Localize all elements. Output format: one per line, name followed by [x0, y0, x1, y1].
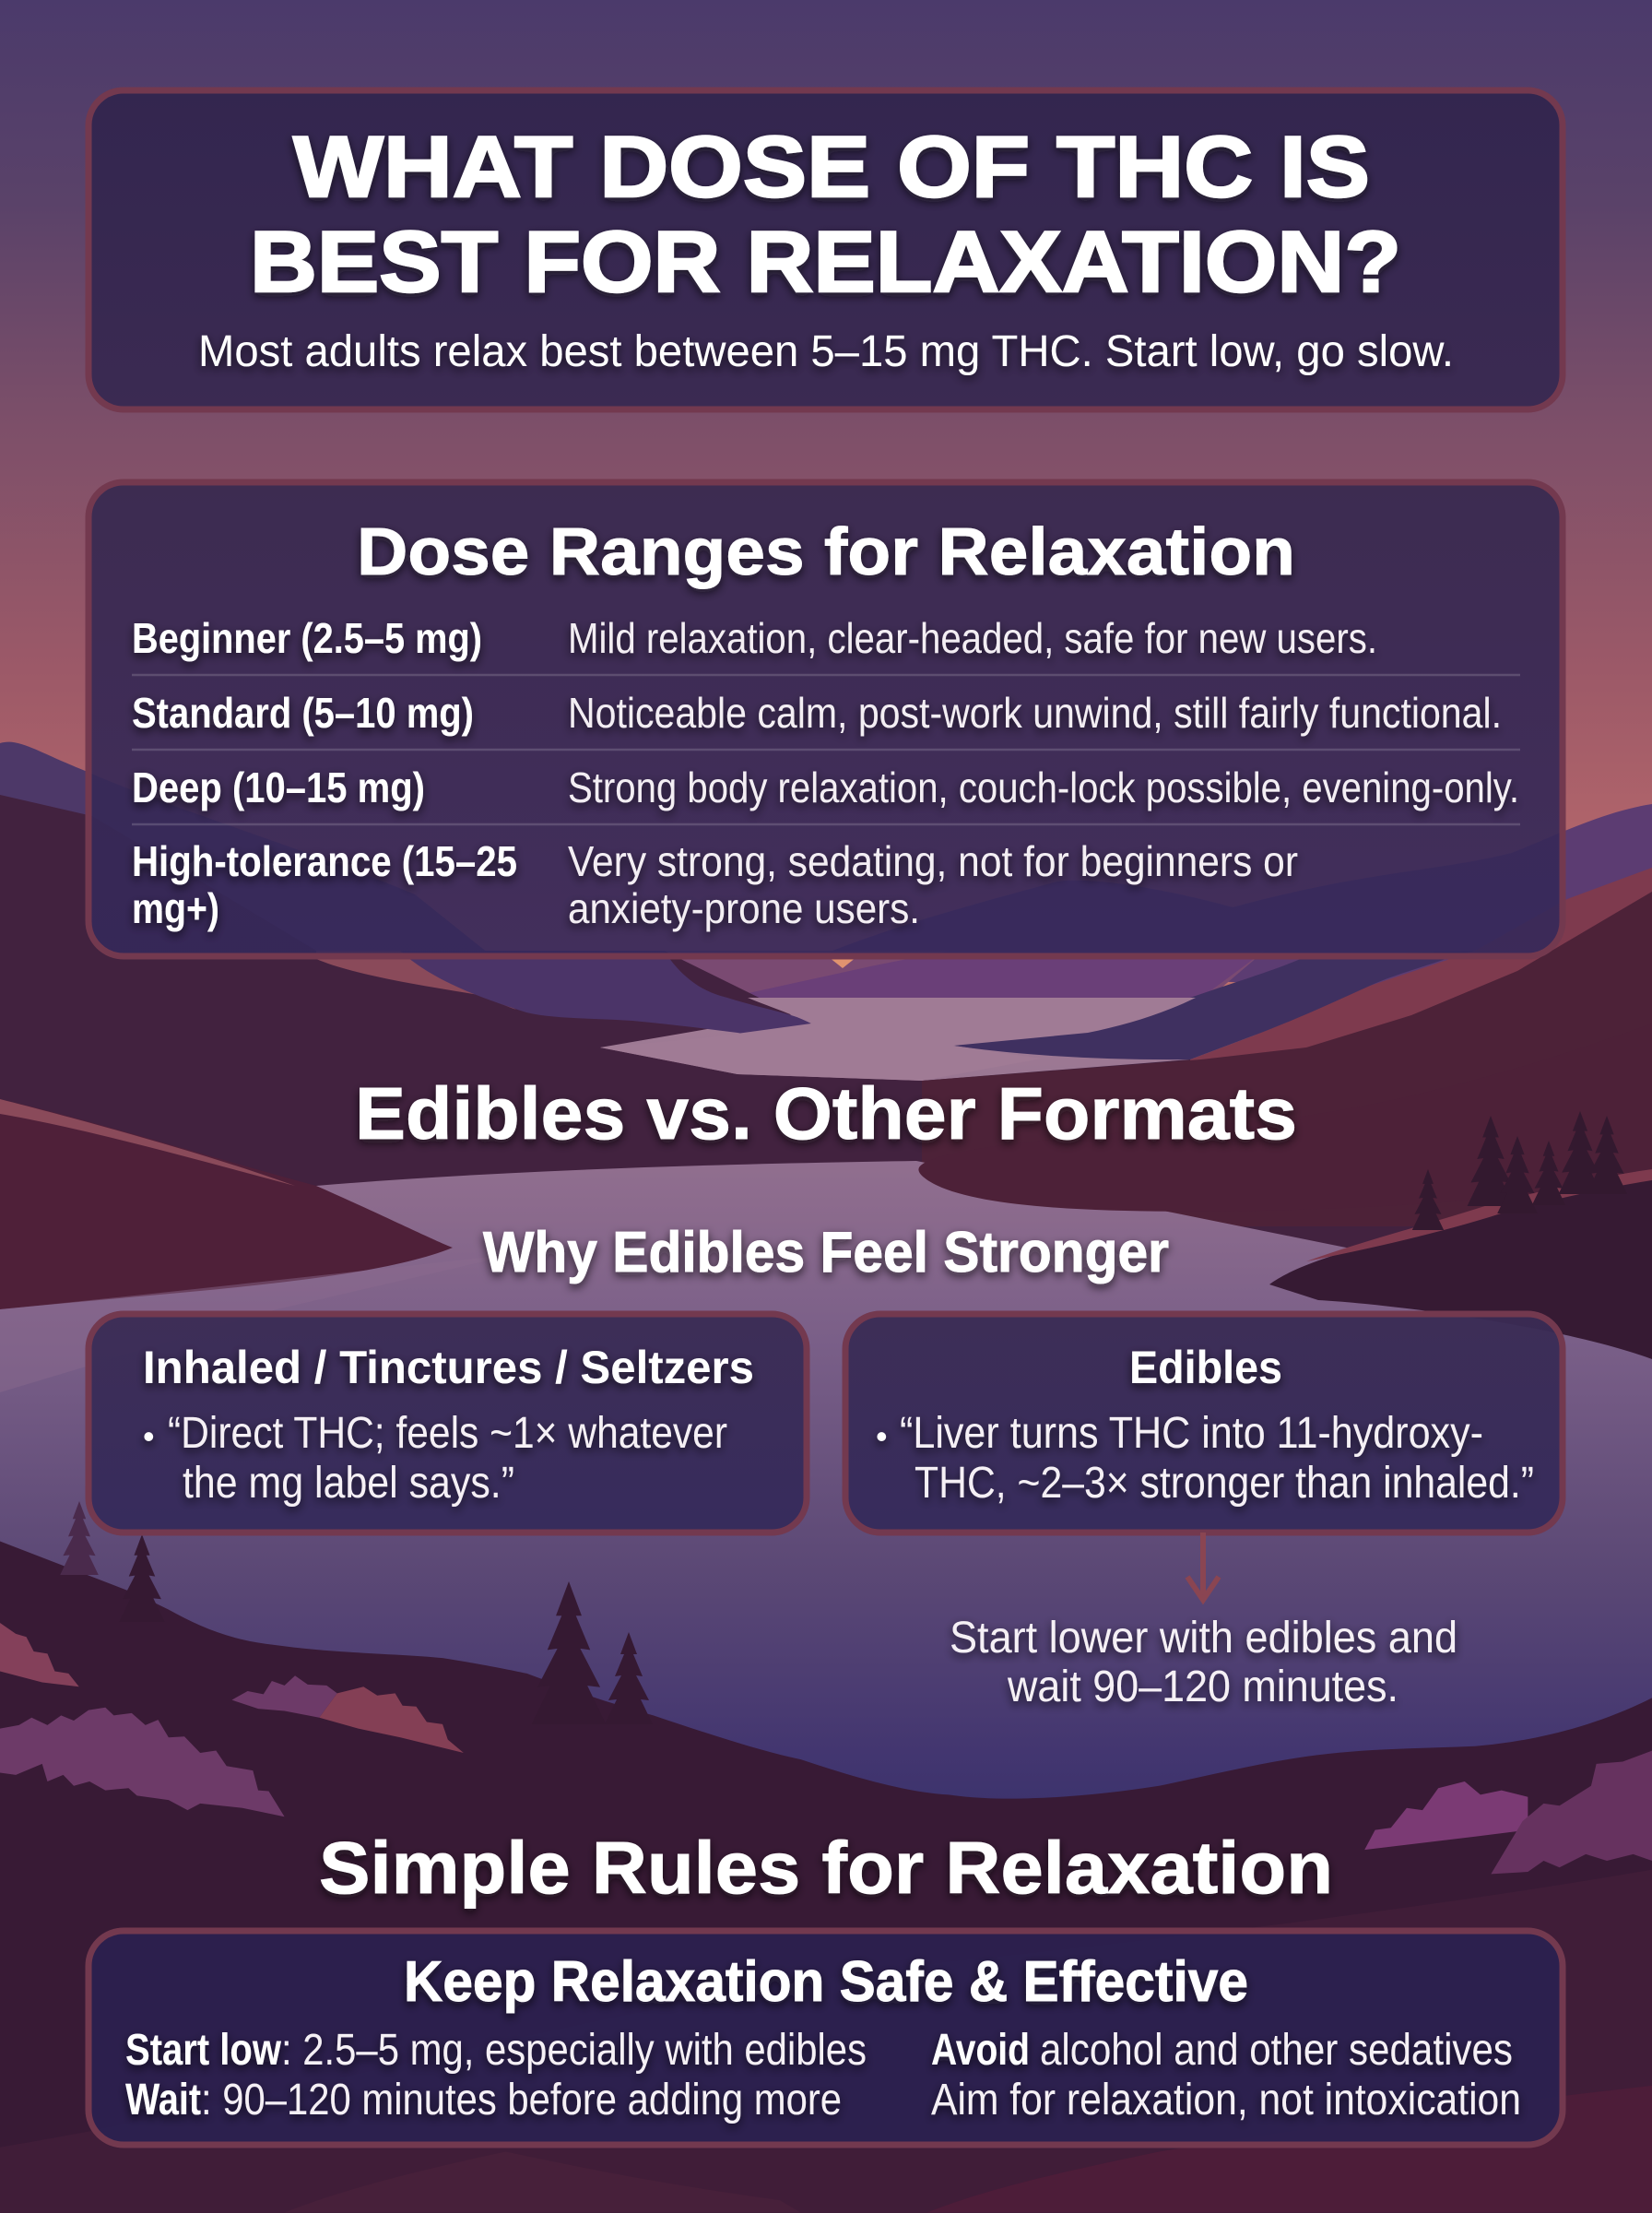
panel: dose ranges	[88, 482, 1563, 956]
title: BEST FOR RELAXATION?	[250, 213, 1401, 310]
panel: edibles: •	[876, 1417, 888, 1455]
rules: left column	[125, 2026, 867, 2124]
panel: edibles: Edibles	[1129, 1342, 1282, 1393]
arrow	[1187, 1533, 1219, 1600]
rules: right column: Aim for relaxation, not intoxication	[931, 2076, 1521, 2124]
left peninsula	[400, 951, 811, 1035]
panel: inhaled: the mg label says.”	[183, 1459, 514, 1508]
rules: left column: Start low	[125, 2026, 282, 2075]
row: standard: Noticeable calm, post-work unwind, still fairly functional.	[568, 689, 1502, 737]
heading: dose ranges: Dose Ranges for Relaxation	[357, 515, 1295, 589]
rules: right column: alcohol and other sedatives	[1040, 2026, 1513, 2075]
row: high-tolerance	[132, 837, 1298, 932]
heading: edibles vs other formats: Edibles vs. Other Formats	[355, 1072, 1297, 1154]
panel: edibles: “Liver turns THC into 11-hydroxy-	[900, 1409, 1483, 1458]
callout: start lower: Start lower with edibles and	[950, 1614, 1457, 1663]
panel: edibles: THC, ~2–3× stronger than inhaled.”	[914, 1459, 1534, 1508]
right shore rim	[1190, 868, 1652, 1199]
rules: left column: : 90–120 minutes before adding more	[201, 2076, 842, 2124]
panel: inhaled	[88, 1314, 807, 1533]
title: WHAT DOSE OF THC IS	[293, 118, 1370, 215]
panel: inhaled: Inhaled / Tinctures / Seltzers	[143, 1342, 754, 1393]
panel: keep relaxation safe	[88, 1931, 1563, 2145]
row: high-tolerance: High-tolerance (15–25	[132, 837, 517, 885]
right peninsula	[953, 951, 1475, 1059]
row: deep: Strong body relaxation, couch-lock possible, evening-only.	[568, 763, 1519, 811]
row: high-tolerance: mg+)	[132, 884, 219, 932]
subheading: why edibles feel stronger: Why Edibles Feel Stronger	[483, 1221, 1169, 1284]
bushes: right purple	[1364, 1781, 1528, 1850]
bushes: left purple	[0, 1708, 285, 1817]
row: standard: Standard (5–10 mg)	[132, 689, 474, 737]
row: beginner: Mild relaxation, clear-headed, safe for new users.	[568, 614, 1377, 662]
rules: right column	[931, 2026, 1521, 2124]
panel: edibles	[845, 1314, 1563, 1533]
trees: far right shore	[1412, 1111, 1627, 1230]
title	[250, 118, 1401, 310]
row: high-tolerance: Very strong, sedating, not for beginners or	[568, 837, 1298, 885]
row: standard	[132, 689, 1502, 737]
row: deep	[132, 763, 1519, 811]
trees: lower hillside	[60, 1501, 653, 1724]
heading: simple rules: Simple Rules for Relaxation	[319, 1827, 1333, 1909]
panel heading: Keep Relaxation Safe & Effective	[404, 1950, 1248, 2014]
callout: start lower	[950, 1614, 1457, 1711]
callout: start lower: wait 90–120 minutes.	[1007, 1663, 1398, 1711]
panel: inhaled: “Direct THC; feels ~1× whatever	[168, 1409, 727, 1458]
row: high-tolerance: anxiety-prone users.	[568, 884, 920, 932]
subtitle: Most adults relax best between 5–15 mg THC. Start low, go slow.	[198, 327, 1454, 376]
rules: left column: Wait	[125, 2076, 201, 2124]
row: beginner: Beginner (2.5–5 mg)	[132, 614, 482, 662]
rules: right column: Avoid	[931, 2026, 1030, 2075]
row: deep: Deep (10–15 mg)	[132, 763, 425, 811]
row: beginner	[132, 614, 1377, 662]
panel: title banner	[88, 90, 1563, 409]
rules: left column: : 2.5–5 mg, especially with edibles	[281, 2026, 867, 2075]
panel: inhaled: •	[143, 1417, 155, 1455]
bushes: left red	[231, 1675, 337, 1718]
